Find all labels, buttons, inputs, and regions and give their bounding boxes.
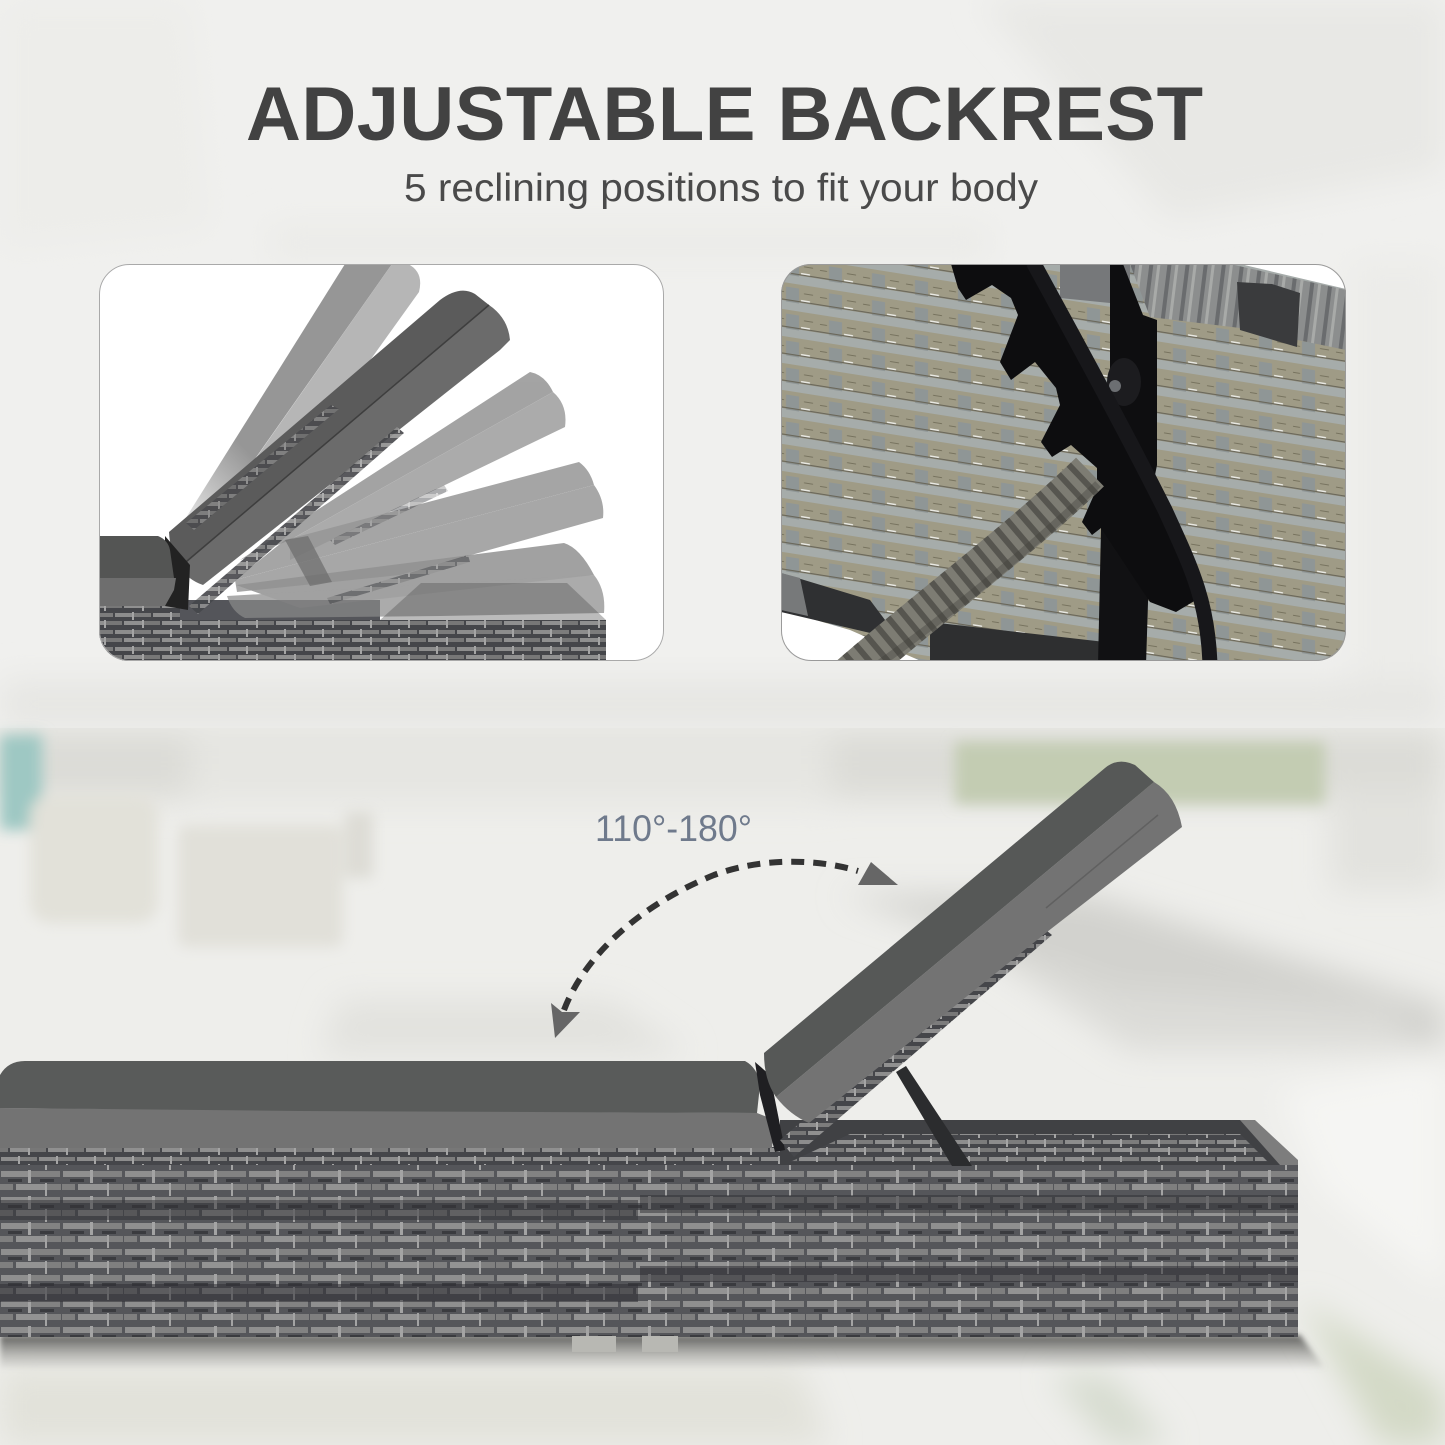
corrugated support bar xyxy=(845,472,1098,680)
lounger xyxy=(0,762,1298,1352)
arrowhead right xyxy=(858,862,898,885)
title: ADJUSTABLE BACKREST xyxy=(246,72,1203,157)
backrest wicker strip xyxy=(780,922,1052,1157)
backrest cushion xyxy=(764,762,1182,1123)
fan position 2 (dark) xyxy=(169,291,510,585)
fan position 4 xyxy=(235,462,603,592)
panel: reclining positions xyxy=(99,264,664,661)
arrowhead left xyxy=(551,1003,580,1038)
wicker strips xyxy=(186,405,470,614)
far inner rim of base xyxy=(780,1120,1298,1180)
panel: backrest notch close-up xyxy=(781,262,1346,680)
mounting bolt xyxy=(1107,358,1141,406)
seat cushion xyxy=(0,1061,775,1148)
notched bracket xyxy=(951,264,1196,612)
bottom rail xyxy=(781,573,1105,665)
right wicker base xyxy=(636,1165,1298,1337)
left wicker base xyxy=(0,1147,780,1337)
woven backrest xyxy=(781,264,1346,661)
background: blurred patio, upper whitened section xyxy=(0,0,1445,728)
background: blurred patio, lower photo section xyxy=(0,728,1445,1445)
angle label: 110°-180° xyxy=(595,808,752,849)
top rail xyxy=(1060,264,1346,350)
seat cushion xyxy=(99,536,190,610)
feet xyxy=(572,1336,678,1352)
ghost glass base xyxy=(380,583,606,620)
chaise wicker base xyxy=(99,600,606,661)
subtitle: 5 reclining positions to fit your body xyxy=(404,167,1039,210)
arrow: recline range xyxy=(551,862,898,1038)
fan position 3 xyxy=(240,372,566,560)
fan position 1 xyxy=(186,265,420,517)
fan position 5 xyxy=(227,543,604,618)
support strut xyxy=(896,1066,972,1166)
floor shadow xyxy=(0,1335,1325,1368)
hinge xyxy=(755,1062,785,1152)
black frame post xyxy=(1098,264,1157,665)
black steel tube xyxy=(1033,262,1210,665)
